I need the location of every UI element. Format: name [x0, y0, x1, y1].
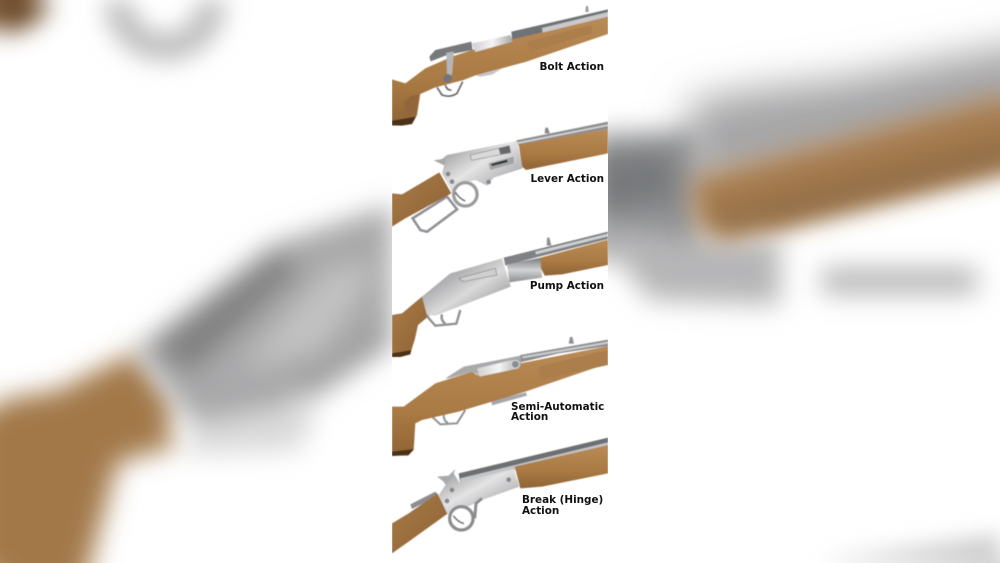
label: Semi-Automatic Action: Action [511, 411, 548, 423]
rifle illustration: pump action [392, 232, 608, 357]
label: Pump Action: Pump Action [530, 280, 604, 292]
label: Break (Hinge) Action: Action [522, 505, 559, 517]
panel: break (hinge) action rifle [392, 438, 608, 553]
rifle illustration: lever action [392, 122, 608, 232]
label: Bolt Action: Bolt Action [540, 61, 604, 73]
centre white panel [392, 0, 608, 563]
gun panels [392, 6, 608, 553]
panel: semi-automatic rifle [392, 337, 608, 456]
label: Semi-Automatic Action: Semi-Automatic [511, 401, 604, 413]
rifle illustration: semi-automatic action [392, 337, 608, 456]
blurred backdrop: right [590, 48, 1000, 563]
panel: pump action rifle [392, 232, 608, 357]
rifle illustration: bolt action [392, 6, 608, 126]
label: Break (Hinge) Action: Break (Hinge) [522, 494, 603, 506]
panel: lever action rifle [392, 122, 608, 232]
blurred backdrop: left [0, 0, 392, 563]
label: Lever Action: Lever Action [530, 173, 604, 185]
panel: bolt action rifle [392, 6, 608, 126]
rifle illustration: break action [392, 438, 608, 553]
